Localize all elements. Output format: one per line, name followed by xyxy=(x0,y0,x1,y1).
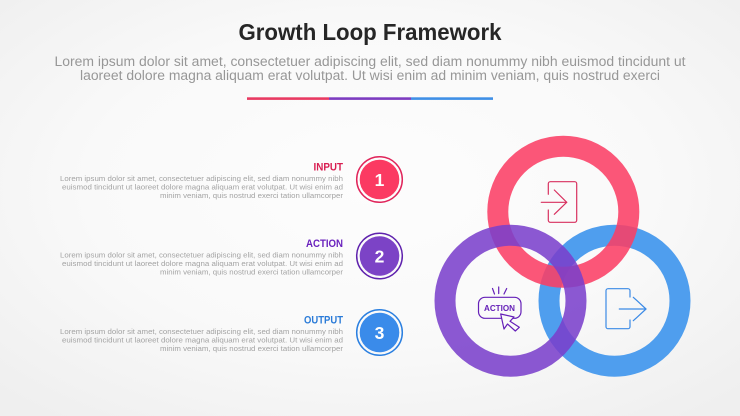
subtitle text block: laoreet dolore magna aliquam erat volutpat. Ut wisi enim ad minim veniam, quis nostrud exerci xyxy=(80,68,660,84)
action description: Lorem ipsum dolor sit amet, consectetuer adipiscing elit, sed diam nonummy nibh xyxy=(60,250,343,260)
input number badge: 1 xyxy=(375,170,385,190)
title: Growth Loop Framework xyxy=(238,19,502,45)
overlapping rings diagram xyxy=(445,146,680,366)
tricolor divider xyxy=(247,97,493,100)
output description: minim veniam, quis nostrud exerci tation ullamcorper xyxy=(160,344,343,353)
icon: action button with cursor: ACTION xyxy=(484,303,515,313)
output description: euismod tincidunt ut laoreet dolore magna aliquam erat volutpat. Ut wisi enim ad xyxy=(62,336,343,344)
icon: action button with cursor xyxy=(478,287,521,331)
action number badge: 2 xyxy=(375,246,385,266)
subtitle text block: Lorem ipsum dolor sit amet, consectetuer adipiscing elit, sed diam nonummy nibh euismod tincidunt ut xyxy=(54,54,686,70)
input description: Lorem ipsum dolor sit amet, consectetuer adipiscing elit, sed diam nonummy nibh xyxy=(60,174,343,183)
action description xyxy=(60,250,343,276)
output number badge xyxy=(357,310,402,355)
item: output xyxy=(60,310,402,355)
input description: minim veniam, quis nostrud exerci tation ullamcorper xyxy=(160,191,343,200)
output number badge: 3 xyxy=(375,323,385,343)
input number badge xyxy=(357,157,402,202)
action description: minim veniam, quis nostrud exerci tation ullamcorper xyxy=(160,268,343,276)
action number badge xyxy=(357,233,402,279)
input heading: INPUT xyxy=(314,162,343,174)
action heading: ACTION xyxy=(306,238,343,250)
output description xyxy=(60,327,343,353)
icon: output arrow xyxy=(606,289,646,329)
icon: input arrow xyxy=(541,182,577,222)
subtitle text block xyxy=(54,54,686,84)
input description xyxy=(60,174,343,200)
red ring xyxy=(498,146,629,277)
item: input xyxy=(60,157,402,202)
input description: euismod tincidunt ut laoreet dolore magna aliquam erat volutpat. Ut wisi enim ad xyxy=(62,182,343,192)
action description: euismod tincidunt ut laoreet dolore magna aliquam erat volutpat. Ut wisi enim ad xyxy=(62,259,343,268)
item: action xyxy=(60,233,402,279)
output description: Lorem ipsum dolor sit amet, consectetuer adipiscing elit, sed diam nonummy nibh xyxy=(60,327,343,336)
blue ring xyxy=(549,235,680,366)
output heading: OUTPUT xyxy=(304,314,343,326)
purple ring xyxy=(445,235,576,366)
